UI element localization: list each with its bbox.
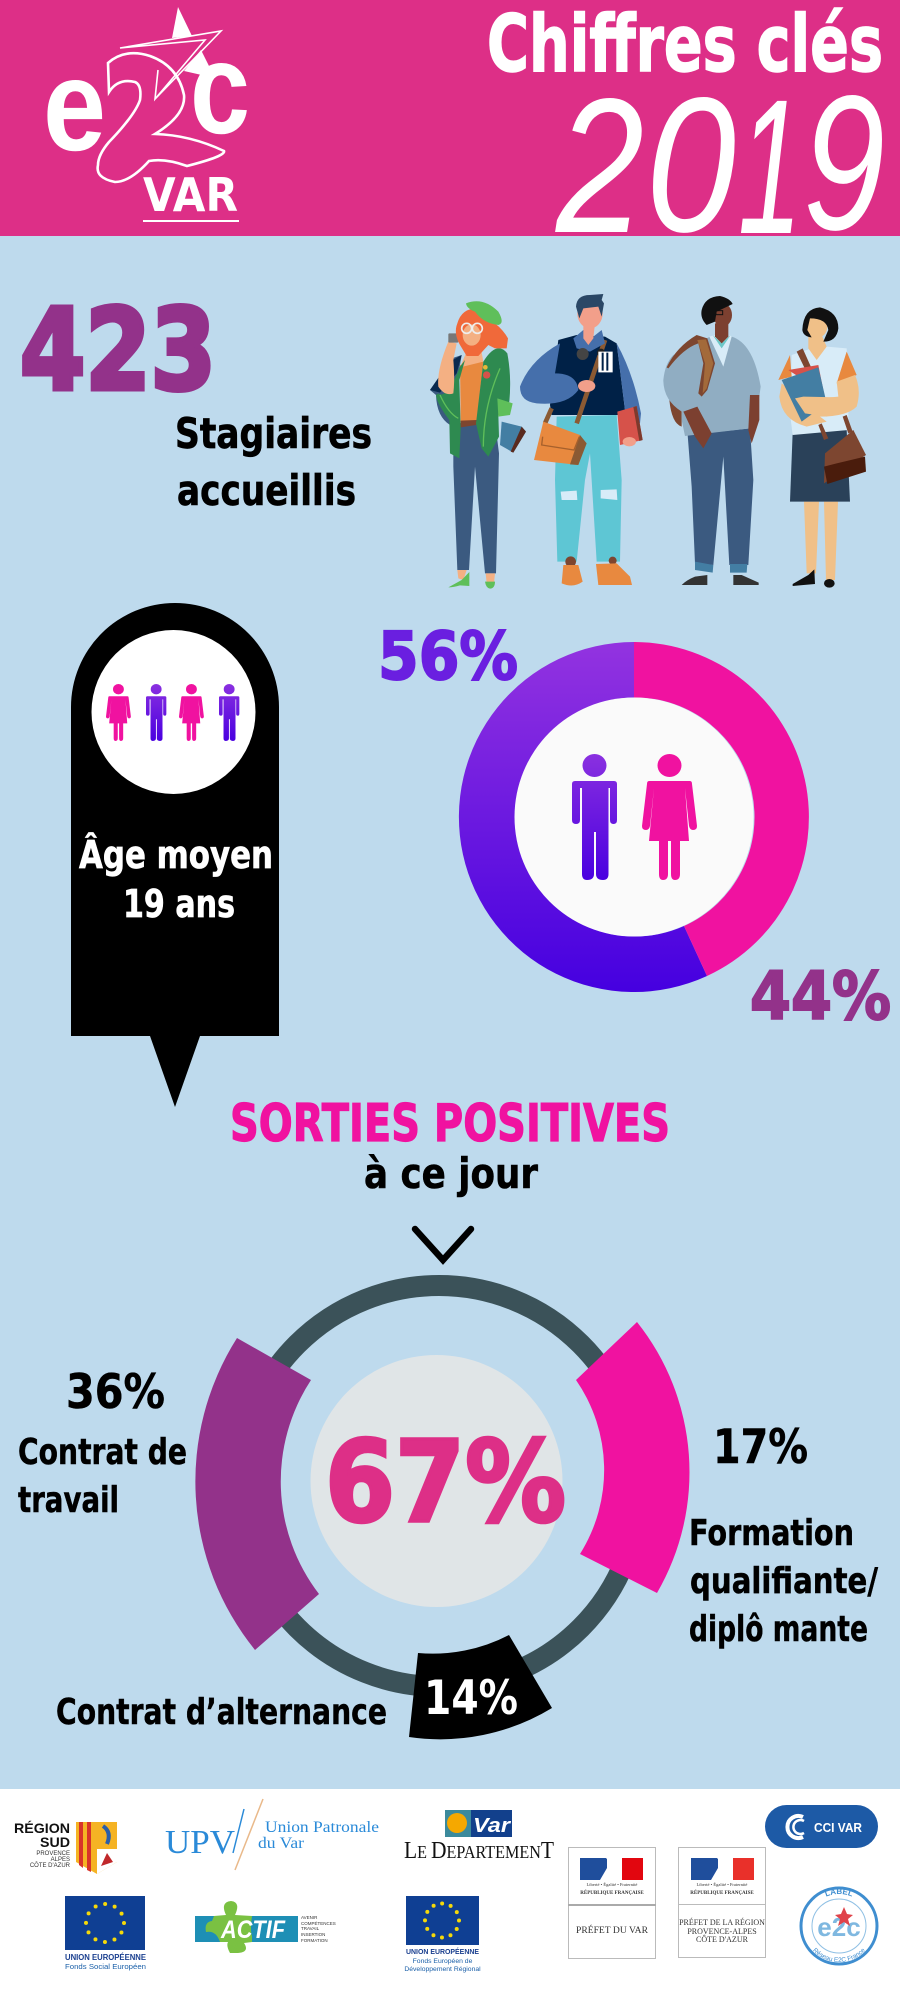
value: 14%: 14% (424, 1671, 518, 1726)
title: 2019: 0 (646, 57, 736, 272)
logo: Département du Var: LE DEPARTEMENT (404, 1838, 554, 1864)
heading: sorties positives: SORTIES POSITIVES (230, 1094, 670, 1154)
logo: Préfet du Var: PRÉFET DU VAR (576, 1924, 649, 1936)
segment: contrat de travail (195, 1338, 319, 1650)
label: formation qualifiante: 17% (713, 1420, 808, 1475)
callout: average age pin (71, 603, 279, 1107)
logo: Département du Var: Var (473, 1815, 511, 1837)
title: 2019: 2 (554, 58, 644, 273)
logo: Région Sud: CÔTE D'AZUR (30, 1862, 71, 1869)
student 2: man with satchel (520, 294, 643, 585)
stat: 423 stagiaires (20, 286, 372, 515)
logo: Préfet du Var: RÉPUBLIQUE FRANÇAISE (580, 1890, 644, 1896)
logo: Préfet de la région: CÔTE D'AZUR (696, 1934, 749, 1944)
logo: Label E2C: Réseau E2C France (813, 1948, 865, 1962)
logo: EU regional fund: Développement Régional (404, 1966, 481, 1973)
logo: EU social fund: UNION EUROPÉENNE (65, 1953, 147, 1962)
logo: EU regional fund: Fonds Européen de (413, 1958, 473, 1965)
stat: 423 stagiaires: 423 (20, 286, 216, 416)
logo: Département du Var (404, 1810, 554, 1864)
chart: positive outcomes ring (195, 1286, 689, 1739)
chart: gender donut (378, 618, 891, 1035)
logo: Région Sud: SUD (40, 1834, 70, 1850)
logo: EU social fund (65, 1896, 147, 1971)
label: contrat de travail (18, 1365, 187, 1521)
heading: sorties positives: à ce jour (364, 1149, 538, 1198)
header band (0, 0, 900, 274)
text: average age: Âge moyen (79, 833, 273, 877)
value: 67%: 67% (325, 1418, 566, 1548)
logo: EU regional fund: UNION EUROPÉENNE (406, 1947, 479, 1956)
logo: Préfet de la région: PROVENCE-ALPES (687, 1927, 757, 1936)
icon: four people (106, 684, 239, 741)
label: contrat de travail: Contrat de (18, 1432, 187, 1473)
logo: UPV (165, 1799, 379, 1870)
logo: Actif: COMPÉTENCES (301, 1920, 336, 1926)
segment: formation qualifiante (576, 1322, 689, 1593)
stat: 423 stagiaires: accueillis (177, 466, 356, 515)
logo: E2C Var: c (190, 15, 250, 161)
stat: 423 stagiaires: Stagiaires (175, 409, 372, 458)
logo: CCI Var (765, 1805, 878, 1848)
label: contrat de travail: travail (18, 1480, 119, 1521)
logo: UPV: du Var (258, 1835, 305, 1852)
student 3: man with backpack (663, 296, 761, 585)
logo: Actif: ACTIF (220, 1916, 286, 1944)
logo: E2C Var (43, 7, 250, 222)
text: average age (79, 833, 273, 926)
logo: CCI Var: CCI VAR (814, 1820, 863, 1835)
footer: partner logos (0, 1789, 900, 2000)
title: 2019 (554, 55, 885, 274)
logo: Actif: FORMATION (301, 1938, 328, 1943)
logo: UPV: Union Patronale (265, 1819, 379, 1836)
logo: EU social fund: Fonds Social Européen (65, 1962, 146, 1971)
logo: Label E2C: e2c (817, 1912, 861, 1942)
logo: Actif (195, 1901, 336, 1953)
label: contrat de travail: 36% (66, 1365, 165, 1420)
logo: Préfet de la région (678, 1848, 766, 1958)
logo: Préfet du Var (568, 1848, 656, 1958)
student 1: woman with beret (430, 301, 526, 589)
illustration: four students (430, 294, 866, 589)
heading: sorties positives (230, 1094, 670, 1198)
icon: woman (642, 754, 697, 880)
logo: Préfet de la région: Liberté • Égalité • Fraternité (697, 1882, 747, 1887)
logo: Préfet de la région: RÉPUBLIQUE FRANÇAISE (690, 1890, 754, 1896)
logo: Région Sud (14, 1820, 117, 1874)
student 4: woman with books (778, 307, 866, 588)
logo: E2C Var: e (43, 32, 106, 178)
segment: contrat d'alternance (409, 1635, 552, 1739)
logo: Label E2C: LABEL (825, 1890, 852, 1896)
label: formation qualifiante (689, 1420, 879, 1650)
logo: Préfet du Var: Liberté • Égalité • Fraternité (587, 1882, 637, 1887)
logo: Actif: TRAVAIL (301, 1926, 320, 1931)
title: 2019: 1 (738, 59, 802, 274)
label: 56%: 56% (378, 618, 518, 695)
label: formation qualifiante: Formation (689, 1513, 854, 1554)
logo: E2C Var: VAR (143, 168, 238, 222)
label: contrat d'alternance: Contrat d’alternance (56, 1692, 387, 1733)
logo: Région Sud: RÉGION (14, 1820, 70, 1836)
logo: EU regional fund (404, 1896, 481, 1973)
logo: Région Sud: PROVENCE (36, 1851, 70, 1857)
text: average age: 19 ans (123, 882, 235, 926)
logo: Label E2C (800, 1886, 878, 1966)
logo: Région Sud: ALPES (51, 1857, 70, 1863)
logo: UPV: UPV (165, 1824, 235, 1861)
logo: Actif: AVENIR (301, 1915, 318, 1920)
logo: Préfet de la région: PRÉFET DE LA RÉGION (679, 1917, 765, 1927)
icon: man (572, 754, 617, 880)
logo: Actif: INSERTION (301, 1932, 325, 1937)
arrow: chevron down (415, 1229, 471, 1260)
